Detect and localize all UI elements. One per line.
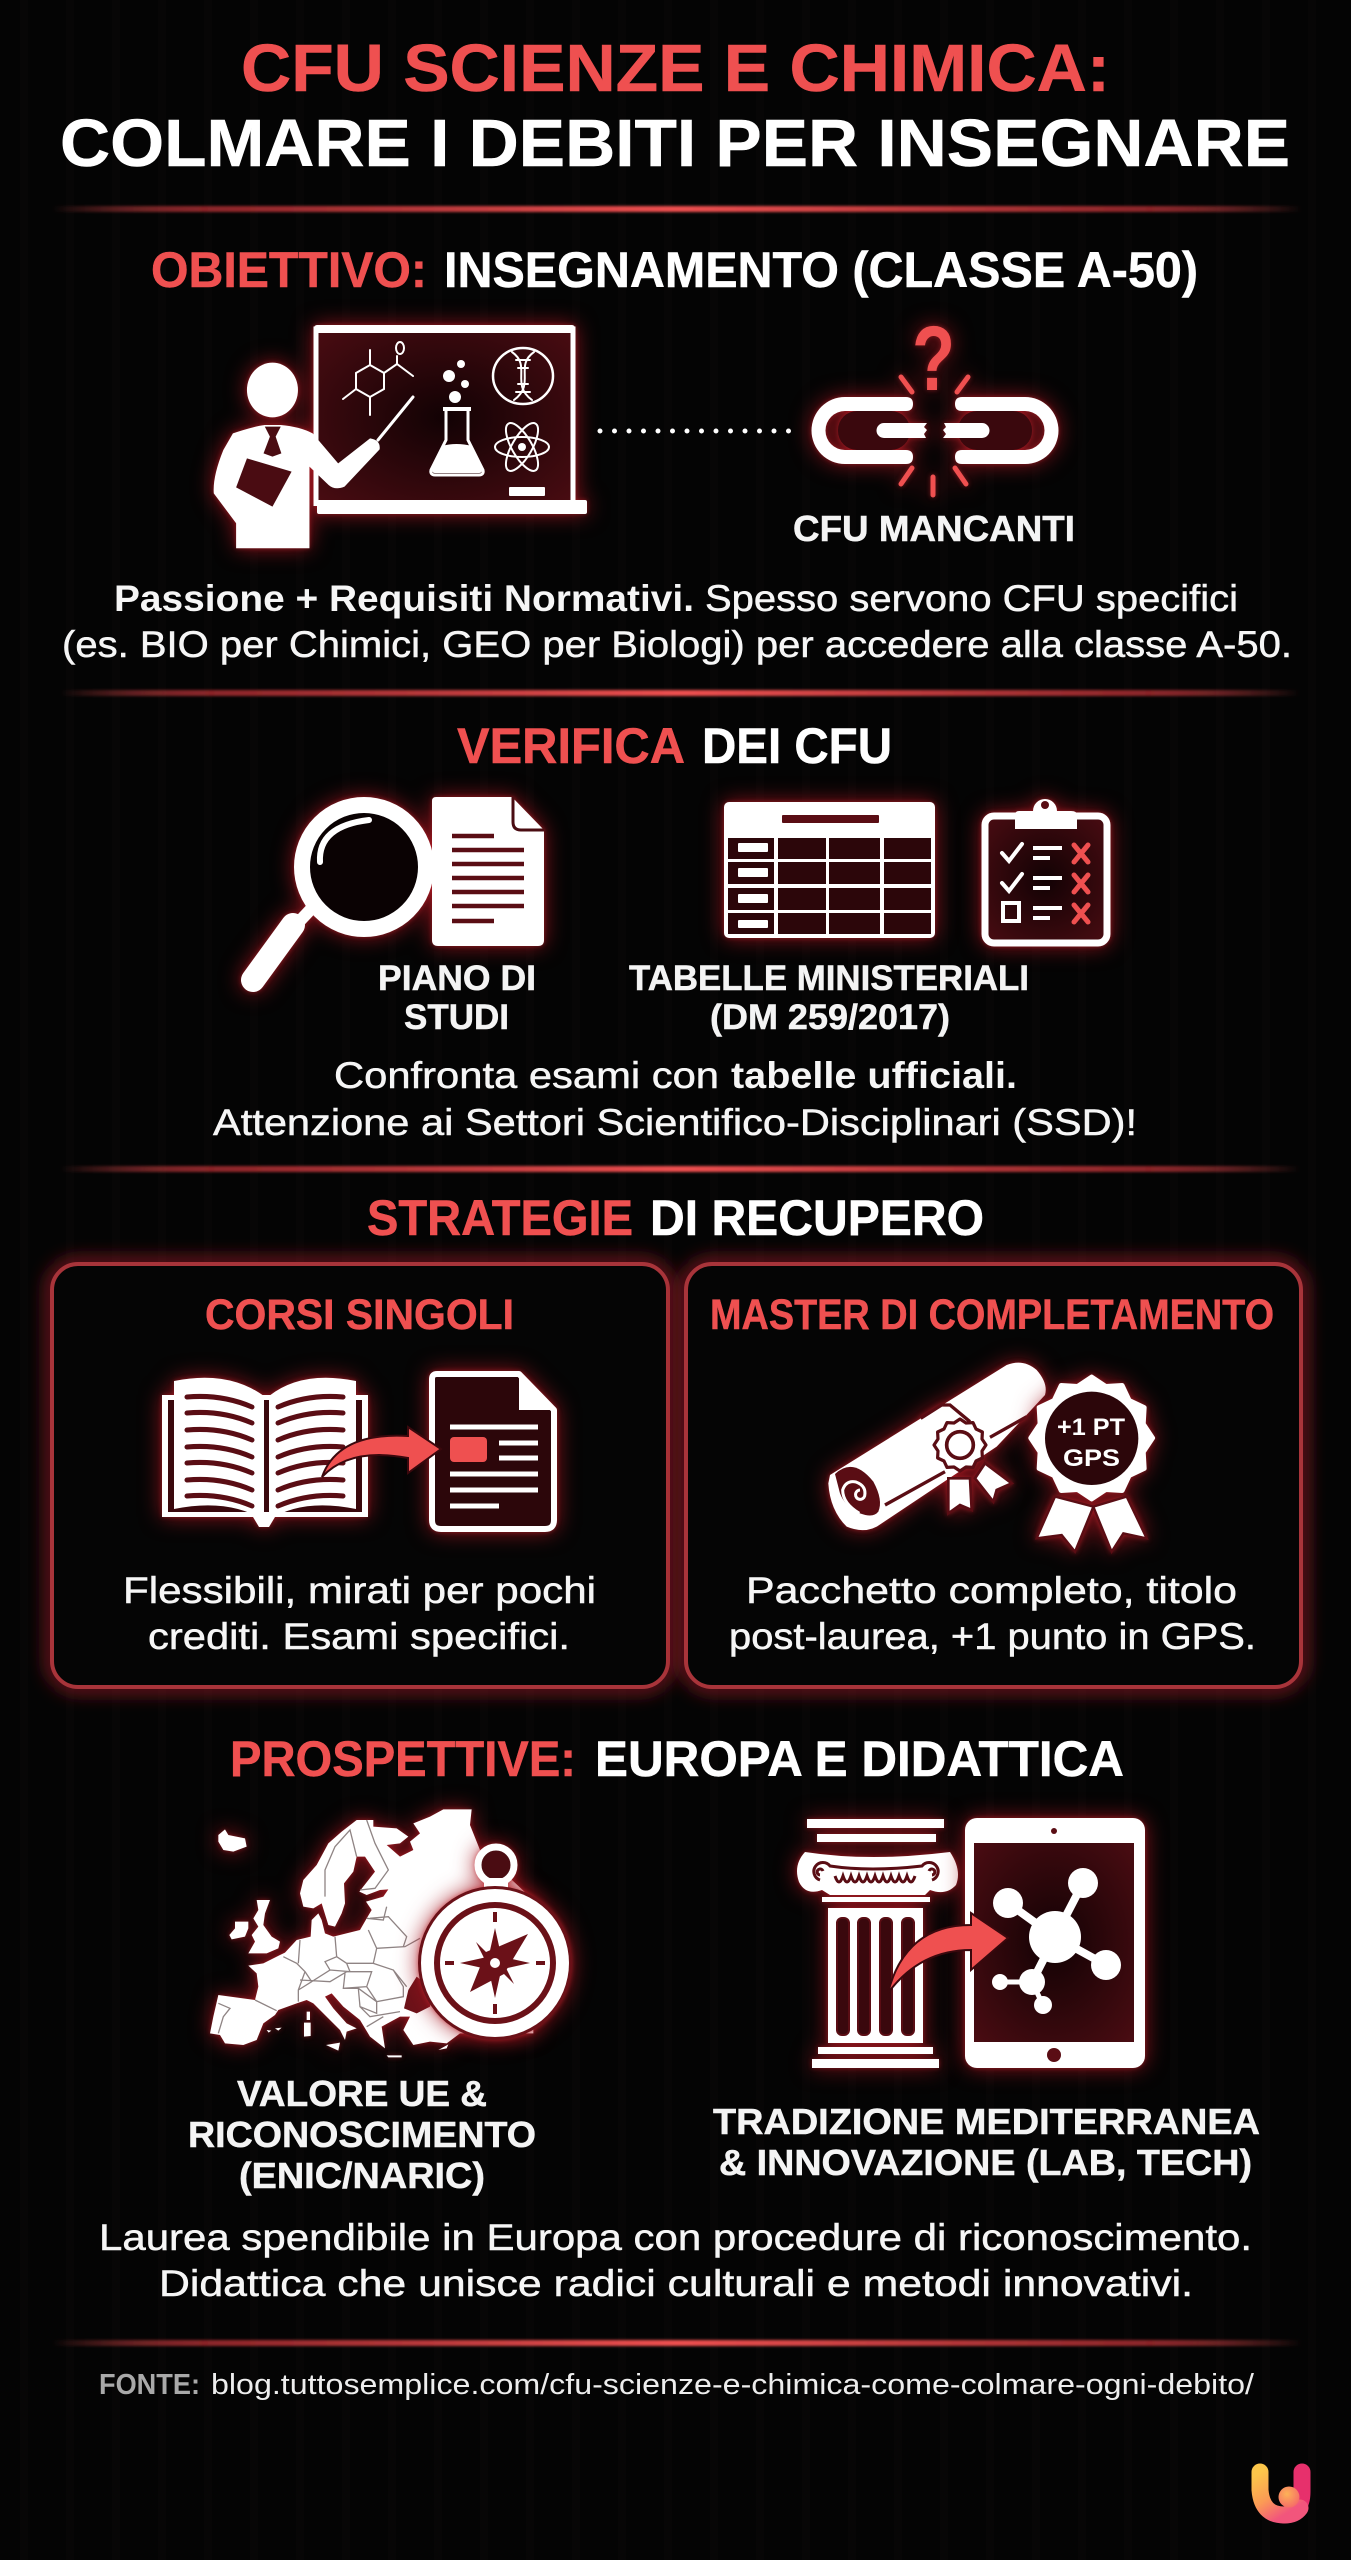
label: valore UE: VALORE UE & — [237, 2073, 487, 2114]
label: tradizione mediterranea: TRADIZIONE MEDITERRANEA — [713, 2101, 1260, 2142]
title: CFU SCIENZE E CHIMICA: — [241, 31, 1110, 106]
icon: ministerial table — [724, 802, 935, 938]
icon: clipboard checklist — [985, 799, 1107, 943]
label: CFU mancanti: CFU MANCANTI — [793, 508, 1075, 549]
icon: diploma scroll — [828, 1363, 1046, 1530]
heading: prospettive: PROSPETTIVE: — [230, 1731, 576, 1787]
label: valore UE — [188, 2073, 536, 2196]
panel text: post-laurea, +1 punto in GPS. — [729, 1616, 1256, 1657]
label: tabelle ministeriali — [629, 959, 1029, 1037]
panel heading: CORSI SINGOLI — [205, 1291, 514, 1339]
icon: tablet with molecule — [965, 1818, 1145, 2068]
icon: +1 PT GPS seal: GPS — [1063, 1445, 1120, 1472]
text block: verifica: tabelle ufficiali. — [731, 1055, 1017, 1096]
title: COLMARE I DEBITI PER INSEGNARE — [60, 106, 1290, 181]
icon: document with highlighted block — [432, 1374, 554, 1529]
panel: master di completamento — [686, 1264, 1301, 1687]
panel text — [123, 1570, 596, 1657]
heading: strategie — [367, 1190, 984, 1246]
heading: verifica — [457, 718, 892, 774]
icon: open book — [162, 1378, 368, 1527]
arrow: book to document — [322, 1427, 441, 1477]
label: tabelle ministeriali: (DM 259/2017) — [710, 998, 950, 1037]
panel text: Flessibili, mirati per pochi — [123, 1570, 596, 1611]
panel: corsi singoli — [52, 1264, 668, 1687]
icon: +1 PT GPS seal: +1 PT — [1057, 1414, 1125, 1441]
text block: prospettive: Didattica che unisce radici culturali e metodi innovativi. — [159, 2263, 1193, 2304]
panel text: Pacchetto completo, titolo — [746, 1570, 1237, 1611]
label: piano di studi: PIANO DI — [378, 959, 536, 998]
text block: verifica: Confronta esami con — [334, 1055, 719, 1096]
icon: +1 PT GPS seal — [1031, 1377, 1153, 1552]
label: valore UE: (ENIC/NARIC) — [239, 2155, 485, 2196]
label: tradizione mediterranea — [713, 2101, 1260, 2183]
icon: teacher at blackboard — [214, 325, 587, 548]
text block: verifica — [213, 1055, 1137, 1143]
text block: obiettivo: (es. BIO per Chimici, GEO per Biologi) per accedere alla classe A-50. — [62, 624, 1292, 665]
source line: blog.tuttosemplice.com/cfu-scienze-e-chimica-come-colmare-ogni-debito/ — [211, 2369, 1255, 2401]
arrow: column to tablet — [888, 1913, 1008, 1993]
label: piano di studi: STUDI — [404, 998, 509, 1037]
heading: obiettivo: OBIETTIVO: — [151, 242, 427, 298]
icon: compass — [418, 1847, 572, 2040]
text block: prospettive: Laurea spendibile in Europa con procedure di riconoscimento. — [99, 2217, 1252, 2258]
heading: prospettive — [230, 1731, 1124, 1787]
icon: europe map — [210, 1809, 533, 2057]
icon: broken chain with question mark: ? — [912, 308, 955, 410]
icon: magnifier and document — [253, 797, 544, 980]
heading: strategie: STRATEGIE — [367, 1190, 633, 1246]
dotted connector — [600, 428, 790, 434]
heading: strategie: DI RECUPERO — [650, 1190, 984, 1246]
text block: obiettivo — [62, 578, 1292, 665]
text block: obiettivo: Passione + Requisiti Normativi. — [114, 578, 694, 619]
heading: obiettivo: INSEGNAMENTO (CLASSE A-50) — [444, 242, 1198, 298]
label: piano di studi — [378, 959, 536, 1037]
heading: verifica: VERIFICA — [457, 718, 685, 774]
text block: obiettivo: Spesso servono CFU specifici — [705, 578, 1238, 619]
panel heading: MASTER DI COMPLETAMENTO — [710, 1291, 1274, 1339]
icon: logo — [1260, 2472, 1302, 2515]
panel text: crediti. Esami specifici. — [148, 1616, 570, 1657]
icon: ionic column — [797, 1819, 958, 2068]
heading: prospettive: EUROPA E DIDATTICA — [595, 1731, 1124, 1787]
heading: verifica: DEI CFU — [702, 718, 892, 774]
text block: prospettive — [99, 2217, 1252, 2304]
source line: FONTE: — [99, 2369, 200, 2401]
label: tabelle ministeriali: TABELLE MINISTERIALI — [629, 959, 1029, 998]
label: tradizione mediterranea: & INNOVAZIONE (LAB, TECH) — [719, 2142, 1252, 2183]
panel text — [729, 1570, 1256, 1657]
title — [60, 31, 1290, 181]
label: valore UE: RICONOSCIMENTO — [188, 2114, 536, 2155]
text block: verifica: Attenzione ai Settori Scientifico-Disciplinari (SSD)! — [213, 1102, 1137, 1143]
icon: broken chain with question mark — [812, 308, 1058, 495]
